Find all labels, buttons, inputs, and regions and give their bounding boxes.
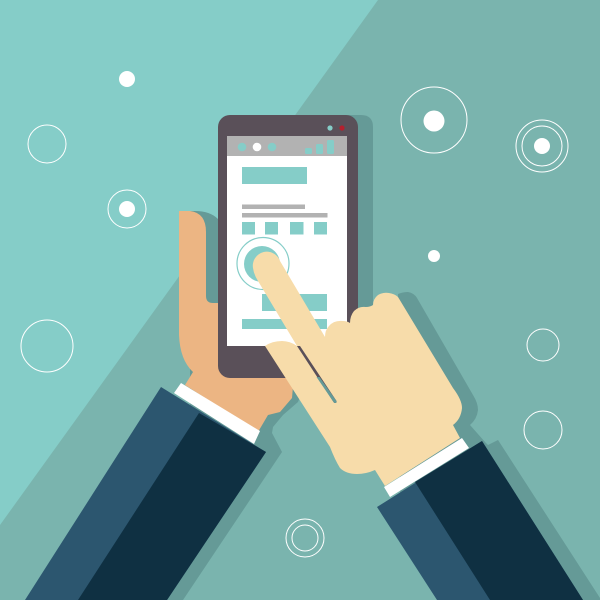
floating circles: [21, 71, 568, 557]
gap between index finger and thumb: [297, 346, 337, 403]
holding hand: [179, 211, 300, 432]
circle: double ring bottom: [286, 519, 324, 557]
shadow: pointing hand: [398, 292, 485, 500]
circle: solid dot top left: [119, 71, 135, 87]
left sleeve: [25, 387, 266, 600]
circle: small dot right: [428, 250, 440, 262]
circle: outline lower left: [21, 320, 73, 372]
right cuff: [384, 438, 469, 497]
right sleeve: [377, 441, 583, 600]
circle: ring with dot left: [108, 190, 146, 228]
screen: [227, 136, 347, 346]
circle: large ring with dot: [401, 87, 467, 153]
touch target circle: [237, 238, 289, 290]
circle: outline top left: [28, 125, 66, 163]
camera dot: [327, 125, 333, 131]
button block: [262, 294, 327, 311]
status bar: [227, 136, 347, 156]
circle: outline lower right: [524, 411, 562, 449]
left cuff: [174, 383, 260, 444]
circle: double ring with dot: [516, 120, 568, 172]
grey text lines: [242, 204, 328, 218]
shadows of hands and phone: [150, 115, 600, 600]
shadow: right sleeve: [470, 427, 600, 600]
sensor dot: [339, 125, 345, 131]
footer block: [242, 319, 327, 329]
header block: [242, 167, 307, 184]
phone: [218, 115, 358, 378]
shadow: holding hand: [150, 211, 300, 600]
four square tiles: [242, 222, 327, 234]
shadow: phone: [230, 115, 373, 330]
circle: outline right: [527, 329, 559, 361]
pointing hand: [253, 252, 462, 486]
phone body: [218, 115, 358, 378]
